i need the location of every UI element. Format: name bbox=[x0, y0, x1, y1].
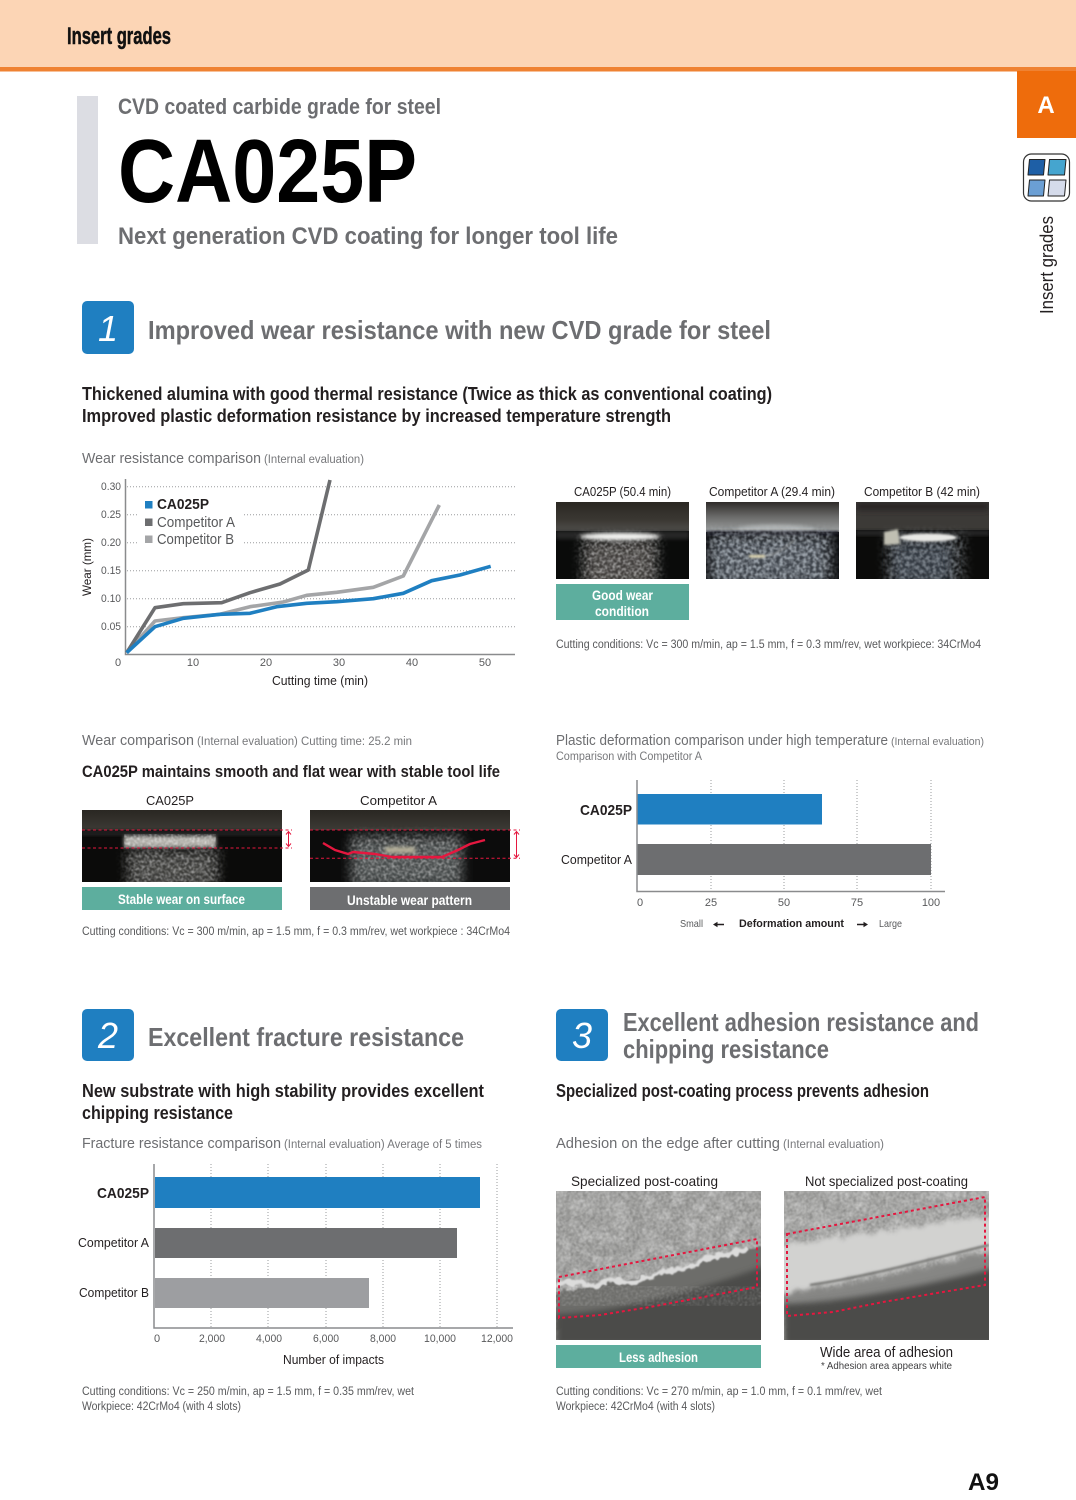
heading: plastic deformation comparison: Plastic deformation comparison under high temperature bbox=[556, 733, 888, 749]
bar chart: deformation amount bbox=[561, 780, 945, 930]
cutting conditions note bbox=[82, 1386, 415, 1413]
bar chart: number of impacts: 10,000 bbox=[424, 1333, 456, 1345]
heading: fracture resistance comparison: Fracture resistance comparison bbox=[82, 1135, 281, 1152]
wear comparison labels bbox=[146, 794, 438, 808]
line chart: wear vs cutting time: 0 bbox=[115, 657, 121, 669]
bar chart: number of impacts: Competitor B bbox=[79, 1286, 149, 1300]
section 2 heading: 2 bbox=[97, 1015, 118, 1056]
section 3 heading: 3 bbox=[572, 1015, 592, 1056]
bar chart: number of impacts: 0 bbox=[154, 1333, 160, 1345]
section 3 key point: Specialized post-coating process prevents adhesion bbox=[556, 1081, 929, 1101]
heading: adhesion on the edge: Adhesion on the edge after cutting bbox=[556, 1135, 780, 1152]
legend: Competitor B bbox=[157, 532, 234, 548]
line chart: wear vs cutting time: 30 bbox=[333, 657, 345, 669]
callout: less adhesion: Less adhesion bbox=[619, 1349, 698, 1365]
side tab: chapter A bbox=[1017, 71, 1076, 138]
heading: fracture resistance comparison bbox=[82, 1135, 482, 1152]
bar chart: deformation amount: 0 bbox=[637, 897, 643, 909]
bar chart: deformation amount: Large bbox=[879, 918, 902, 930]
legend: Competitor A bbox=[157, 515, 235, 531]
bar chart: deformation amount: Competitor A bbox=[561, 853, 633, 867]
wear comparison statement: CA025P maintains smooth and flat wear with stable tool life bbox=[82, 762, 500, 781]
section 1 heading: 1 bbox=[98, 308, 118, 349]
bar chart: number of impacts bbox=[78, 1164, 513, 1367]
bar chart: number of impacts: 6,000 bbox=[313, 1333, 339, 1345]
section 2 key points: chipping resistance bbox=[82, 1103, 233, 1123]
adhesion photo labels: Specialized post-coating bbox=[571, 1173, 718, 1189]
caption: wide area of adhesion: * Adhesion area appears white bbox=[821, 1360, 952, 1372]
section 1 key points: Improved plastic deformation resistance by increased temperature strength bbox=[82, 406, 671, 426]
title block: CA025P bbox=[118, 122, 417, 222]
callout: stable wear on surface: Stable wear on surface bbox=[118, 891, 245, 907]
bar chart: number of impacts: CA025P bbox=[97, 1185, 149, 1202]
photo labels: Competitor B (42 min) bbox=[864, 485, 980, 499]
bar chart: number of impacts: 8,000 bbox=[370, 1333, 396, 1345]
heading: wear resistance comparison bbox=[82, 450, 364, 467]
heading: plastic deformation comparison bbox=[556, 733, 984, 763]
line chart: wear vs cutting time bbox=[80, 479, 516, 688]
cutting conditions note: Workpiece: 42CrMo4 (with 4 slots) bbox=[556, 1401, 715, 1413]
heading: wear resistance comparison: Wear resistance comparison bbox=[82, 450, 261, 467]
side tab: chapter A: A bbox=[1037, 92, 1055, 119]
callout: unstable wear pattern bbox=[310, 887, 510, 910]
bar chart: deformation amount: 100 bbox=[922, 897, 940, 909]
section 3 heading: Excellent adhesion resistance and bbox=[623, 1007, 979, 1037]
line chart: wear vs cutting time: 20 bbox=[260, 657, 272, 669]
line chart: wear vs cutting time: 0.20 bbox=[101, 537, 121, 549]
photo labels: Competitor A (29.4 min) bbox=[709, 485, 835, 499]
photo: competitor B wear after 42 min bbox=[856, 502, 989, 584]
header band: Insert grades bbox=[67, 23, 171, 50]
wear comparison labels: CA025P bbox=[146, 794, 194, 808]
line chart: wear vs cutting time: 50 bbox=[479, 657, 491, 669]
line chart: wear vs cutting time: 0.30 bbox=[101, 481, 121, 493]
wear comparison labels: Competitor A bbox=[360, 794, 438, 808]
page number: A9 bbox=[968, 1469, 999, 1496]
callout: good wear condition: condition bbox=[595, 603, 649, 619]
legend bbox=[145, 497, 235, 548]
heading: plastic deformation comparison: Comparison with Competitor A bbox=[556, 751, 702, 763]
callout: good wear condition bbox=[556, 584, 689, 620]
arrow: toward large bbox=[857, 922, 868, 927]
bar chart: deformation amount: 50 bbox=[778, 897, 790, 909]
section 2 heading: Excellent fracture resistance bbox=[148, 1022, 464, 1052]
title block bbox=[77, 94, 618, 250]
bar chart: deformation amount: 75 bbox=[851, 897, 863, 909]
title block: CVD coated carbide grade for steel bbox=[118, 94, 441, 119]
section 2 key points bbox=[82, 1081, 484, 1123]
line chart: wear vs cutting time: Cutting time (min) bbox=[272, 674, 368, 688]
callout: good wear condition: Good wear bbox=[592, 587, 653, 603]
heading: adhesion on the edge bbox=[556, 1135, 884, 1152]
section 1 heading bbox=[82, 301, 771, 354]
cutting conditions note: Cutting conditions: Vc = 250 m/min, ap = 1.5 mm, f = 0.35 mm/rev, wet bbox=[82, 1386, 415, 1398]
bar chart: deformation amount: Small bbox=[680, 918, 703, 930]
bar chart: deformation amount: 25 bbox=[705, 897, 717, 909]
section 3 heading bbox=[556, 1007, 979, 1064]
callout: unstable wear pattern: Unstable wear pattern bbox=[347, 892, 472, 908]
section 1 key points: Thickened alumina with good thermal resistance (Twice as thick as conventional coating) bbox=[82, 384, 772, 404]
line chart: wear vs cutting time: 0.25 bbox=[101, 509, 121, 521]
section 2 heading bbox=[82, 1009, 464, 1061]
line chart: wear vs cutting time: 0.05 bbox=[101, 621, 121, 633]
cutting conditions note: Workpiece: 42CrMo4 (with 4 slots) bbox=[82, 1401, 241, 1413]
photo labels: CA025P (50.4 min) bbox=[574, 485, 671, 499]
bar chart: number of impacts: 4,000 bbox=[256, 1333, 282, 1345]
heading: wear resistance comparison: (Internal evaluation) bbox=[264, 454, 364, 466]
photo: CA025P stable wear bbox=[82, 810, 292, 888]
heading: wear comparison: (Internal evaluation) Cutting time: 25.2 min bbox=[197, 736, 412, 748]
bar chart: deformation amount: CA025P bbox=[580, 802, 632, 819]
arrow: toward small bbox=[713, 922, 724, 927]
photo: specialized post-coating bbox=[556, 1191, 770, 1345]
cutting conditions note: Cutting conditions: Vc = 270 m/min, ap = 1.0 mm, f = 0.1 mm/rev, wet bbox=[556, 1386, 883, 1398]
callout: stable wear on surface bbox=[82, 887, 282, 910]
callout: less adhesion bbox=[556, 1345, 761, 1368]
line chart: wear vs cutting time: 10 bbox=[187, 657, 199, 669]
section 1 key points bbox=[82, 384, 772, 426]
section 3 heading: chipping resistance bbox=[623, 1034, 829, 1064]
photo: competitor A wear after 29.4 min bbox=[706, 502, 839, 586]
bar chart: number of impacts: 2,000 bbox=[199, 1333, 225, 1345]
caption: wide area of adhesion: Wide area of adhesion bbox=[820, 1345, 953, 1361]
photo: CA025P wear after 50.4 min bbox=[556, 502, 689, 587]
cutting conditions note: Cutting conditions: Vc = 300 m/min, ap = 1.5 mm, f = 0.3 mm/rev, wet workpiece : 34CrMo4 bbox=[82, 926, 511, 938]
title block: Next generation CVD coating for longer tool life bbox=[118, 223, 618, 250]
bar chart: number of impacts: Number of impacts bbox=[283, 1353, 384, 1367]
legend: CA025P bbox=[157, 497, 209, 513]
bar chart: number of impacts: Competitor A bbox=[78, 1236, 150, 1250]
cutting conditions note: Cutting conditions: Vc = 300 m/min, ap = 1.5 mm, f = 0.3 mm/rev, wet workpiece: 34CrMo4 bbox=[556, 639, 982, 651]
heading: fracture resistance comparison: (Internal evaluation) Average of 5 times bbox=[284, 1139, 482, 1151]
photo labels bbox=[574, 485, 980, 499]
heading: adhesion on the edge: (Internal evaluation) bbox=[783, 1139, 884, 1151]
photo: not specialized post-coating bbox=[780, 1191, 995, 1345]
line chart: wear vs cutting time: 40 bbox=[406, 657, 418, 669]
icon: insert grades tiles bbox=[1024, 154, 1070, 201]
bar chart: number of impacts: 12,000 bbox=[481, 1333, 513, 1345]
section 2 key points: New substrate with high stability provides excellent bbox=[82, 1081, 484, 1101]
section 1 heading: Improved wear resistance with new CVD grade for steel bbox=[148, 315, 771, 345]
bar chart: deformation amount: Deformation amount bbox=[739, 918, 844, 930]
adhesion photo labels bbox=[571, 1173, 968, 1189]
caption: wide area of adhesion bbox=[820, 1345, 953, 1372]
cutting conditions note bbox=[556, 1386, 883, 1413]
heading: wear comparison bbox=[82, 732, 412, 749]
side label: insert grades: Insert grades bbox=[1037, 216, 1057, 314]
photo: competitor A unstable wear bbox=[310, 810, 520, 886]
line chart: wear vs cutting time: 0.15 bbox=[101, 565, 121, 577]
header band bbox=[0, 0, 1076, 72]
line chart: wear vs cutting time: 0.10 bbox=[101, 593, 121, 605]
adhesion photo labels: Not specialized post-coating bbox=[805, 1173, 968, 1189]
line chart: wear vs cutting time: Wear (mm) bbox=[80, 538, 94, 596]
heading: wear comparison: Wear comparison bbox=[82, 732, 194, 749]
heading: plastic deformation comparison: (Internal evaluation) bbox=[891, 736, 984, 748]
